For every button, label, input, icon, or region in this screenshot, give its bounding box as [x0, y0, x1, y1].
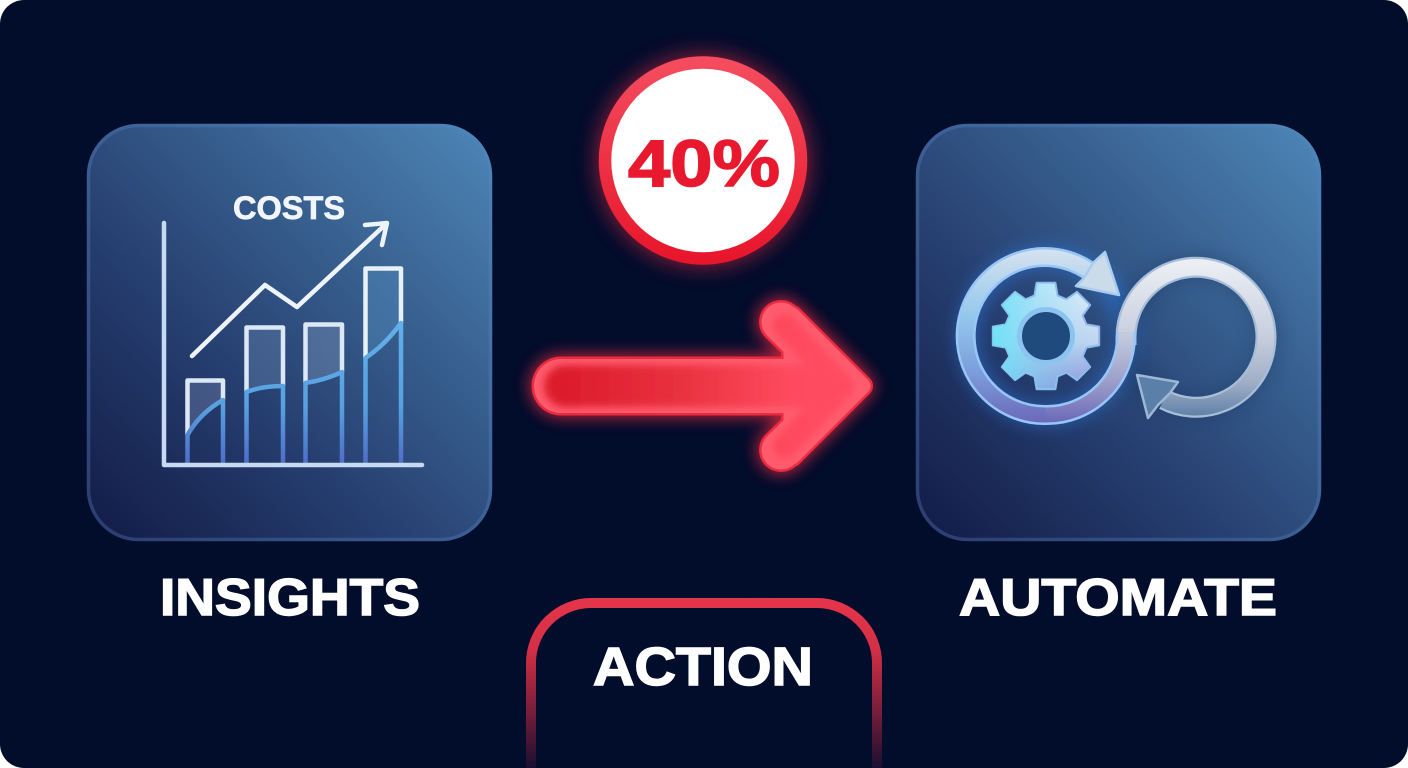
bar 4 [365, 268, 401, 463]
arrowhead: top [1076, 252, 1119, 295]
left loop [966, 257, 1126, 415]
label: automate: AUTOMATE [959, 569, 1277, 627]
bar 2 [246, 327, 283, 463]
arrowhead: bottom [1137, 375, 1178, 418]
label: action: ACTION [593, 637, 813, 697]
label: costs: COSTS [233, 190, 345, 226]
value: 40%: 40% [628, 126, 780, 200]
label: insights: INSIGHTS [160, 569, 420, 627]
panel: insights [88, 126, 490, 540]
icon: gear and infinity loop [966, 252, 1266, 418]
bar 1 [187, 380, 223, 463]
bar 3 [305, 324, 342, 463]
bar chart: costs [164, 223, 422, 465]
badge: 40% [599, 56, 807, 264]
trend arrow [192, 223, 387, 356]
right loop [1126, 267, 1266, 407]
panel: automate [918, 126, 1320, 540]
action frame [531, 603, 877, 768]
arrow: insights to automate [561, 316, 862, 456]
axes [164, 223, 422, 465]
icon: gear [993, 283, 1099, 389]
